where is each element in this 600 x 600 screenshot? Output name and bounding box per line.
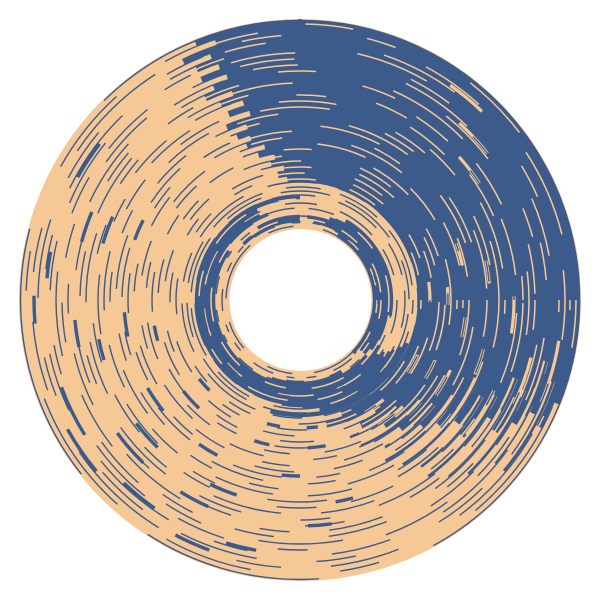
seam cover at top of ring [298, 19, 302, 179]
wider peach streaks near the lower right transition [38, 38, 562, 562]
inner blue band [185, 185, 415, 415]
blue fingers at the lower right edge [34, 34, 566, 566]
center hole [230, 229, 372, 371]
thick blue clusters in the lower left [34, 34, 566, 566]
